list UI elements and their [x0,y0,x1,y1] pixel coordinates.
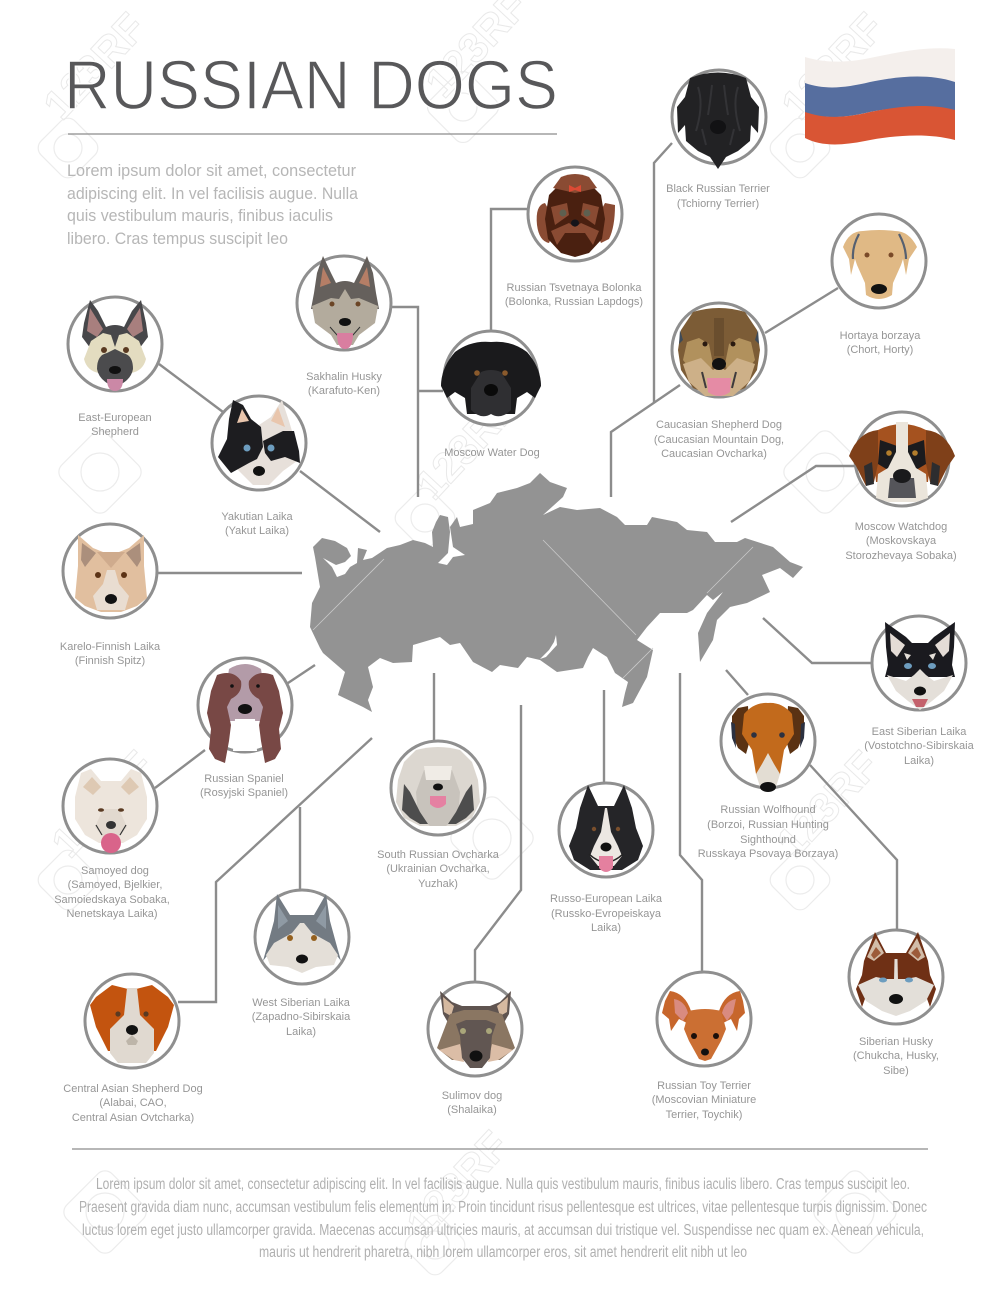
dog: Central Asian Shepherd Dog: Central Asian Shepherd Dog [63,1083,203,1095]
text: 123RF [767,742,888,866]
dog: Hortaya Borzaya: (Chort, Horty) [847,344,913,356]
dog: Hortaya Borzaya [832,214,926,356]
dog: East-European Shepherd: East-European [78,412,152,424]
text: 123RF [34,4,155,128]
dog: Siberian Husky [849,930,943,1077]
dog: Moscow Watchdog: Moscow Watchdog [855,521,947,533]
dog: Siberian Husky: Siberian Husky [859,1036,933,1048]
dog: Samoyed dog: Samoiedskaya Sobaka, [54,894,170,906]
dog: East-European Shepherd [68,297,162,438]
dog: West Siberian Laika [252,890,351,1038]
dog: Caucasian Shepherd Dog: Caucasian Ovcharka) [661,448,767,460]
dog: South Russian Ovcharka: (Ukrainian Ovcharka, [386,863,490,875]
dog: Russian Wolfhound: (Borzoi, Russian Hunting [707,819,829,831]
intro text [67,161,359,248]
dog: East Siberian Laika [864,616,975,767]
dog: Siberian Husky: Sibe) [883,1065,909,1077]
dog: Russian Wolfhound: Russkaya Psovaya Borzaya) [698,848,838,860]
dog: Russian Tsvetnaya Bolonka: Russian Tsvetnaya Bolonka [507,282,642,294]
dog: Sulimov dog: Sulimov dog [442,1090,502,1102]
text: 123RF [772,4,893,128]
text: 123RF [42,742,163,866]
dog: Russian Toy Terrier: (Moscovian Miniature [652,1094,756,1106]
dog: Samoyed dog [54,759,170,920]
dog: Karelo-Finnish Laika: (Finnish Spitz) [75,655,145,667]
dog: Moscow Water Dog: Moscow Water Dog [444,447,540,459]
dog: Russo-European Laika [550,783,663,934]
dog: Central Asian Shepherd Dog: (Alabai, CAO, [99,1097,167,1109]
dog: East-European Shepherd: Shepherd [91,426,139,438]
dog: Russian Spaniel [198,658,292,799]
dog: Karelo-Finnish Laika [60,524,161,667]
dog: Russo-European Laika: Laika) [591,922,621,934]
text: 123RF [406,384,527,508]
text: 123RF [397,1122,518,1246]
dog: Russian Spaniel: (Rosyjski Spaniel) [200,787,288,799]
dog: East Siberian Laika: Laika) [904,755,934,767]
icon: Russian flag [805,48,955,144]
dog: Moscow Watchdog: (Moskovskaya [866,535,937,547]
title: RUSSIAN DOGS [64,46,558,124]
dog: Central Asian Shepherd Dog: Central Asian Ovtcharka) [72,1112,194,1124]
dog: Russian Spaniel: Russian Spaniel [204,773,284,785]
dog: Samoyed dog: (Samoyed, Bjelkier, [68,879,162,891]
dog: Yakutian Laika [212,396,306,537]
dog: South Russian Ovcharka [377,741,500,890]
dog: West Siberian Laika: (Zapadno-Sibirskaia [252,1011,351,1023]
dog: Central Asian Shepherd Dog [63,974,203,1124]
dog: Caucasian Shepherd Dog: (Caucasian Mountain Dog, [654,434,784,446]
dog: Russian Wolfhound: Sighthound [740,834,796,846]
connector lines [155,143,897,1002]
dog: Sakhalin Husky: Sakhalin Husky [306,371,382,383]
dog: Russian Toy Terrier: Terrier, Toychik) [666,1109,742,1121]
dog: Caucasian Shepherd Dog [654,303,784,460]
dog: Russo-European Laika: (Russko-Evropeiskaya [551,908,662,920]
intro text: adipiscing elit. In vel facilisis augue. Nulla [67,184,359,203]
dog: Sakhalin Husky [297,256,391,397]
dog: Russian Toy Terrier: Russian Toy Terrier [657,1080,751,1092]
dog: Sulimov dog [428,982,522,1116]
map of Russia [310,473,803,712]
dog: Black Russian Terrier [666,70,770,210]
dog: East Siberian Laika: (Vostotchno-Sibirskaia [864,740,975,752]
dog: Russo-European Laika: Russo-European Laika [550,893,663,905]
dog: Yakutian Laika: (Yakut Laika) [225,525,289,537]
dog: Hortaya Borzaya: Hortaya borzaya [840,330,921,342]
footer text: mauris ut hendrerit pharetra, nibh lorem ullamcorper eros, sit amet hendrerit elit nibh ut leo [259,1244,747,1261]
dog: Black Russian Terrier: Black Russian Terrier [666,183,770,195]
dog: East Siberian Laika: East Siberian Laika [872,726,967,738]
dog: Samoyed dog: Samoyed dog [81,865,149,877]
dog: Russian Tsvetnaya Bolonka [505,167,643,308]
dog: South Russian Ovcharka: Yuzhak) [418,878,458,890]
dog: Siberian Husky: (Chukcha, Husky, [853,1050,939,1062]
dog: Russian Tsvetnaya Bolonka: (Bolonka, Russian Lapdogs) [505,296,643,308]
dog: West Siberian Laika: Laika) [286,1026,316,1038]
dog: West Siberian Laika: West Siberian Laika [252,997,351,1009]
dog: Moscow Water Dog [441,331,541,459]
dog: South Russian Ovcharka: South Russian Ovcharka [377,849,500,861]
dog: Moscow Watchdog: Storozhevaya Sobaka) [845,550,957,562]
intro text: libero. Cras tempus suscipit leo [67,229,288,248]
dog: Sulimov dog: (Shalaika) [447,1104,497,1116]
dog: Caucasian Shepherd Dog: Caucasian Shepherd Dog [656,419,782,431]
dog: Russian Toy Terrier [652,972,756,1121]
dog: Karelo-Finnish Laika: Karelo-Finnish Laika [60,641,161,653]
dog: Sakhalin Husky: (Karafuto-Ken) [308,385,380,397]
dog: Black Russian Terrier: (Tchiorny Terrier) [677,198,759,210]
intro text: Lorem ipsum dolor sit amet, consectetur [67,161,356,180]
intro text: quis vestibulum mauris, finibus iaculis [67,206,333,225]
dog: Samoyed dog: Nenetskaya Laika) [66,908,158,920]
dog: Yakutian Laika: Yakutian Laika [221,511,294,523]
dog: Russian Wolfhound: Russian Wolfhound [720,804,816,816]
footer text [79,1176,927,1261]
dog: Russian Wolfhound [698,694,838,860]
dog: Moscow Watchdog [845,412,957,562]
